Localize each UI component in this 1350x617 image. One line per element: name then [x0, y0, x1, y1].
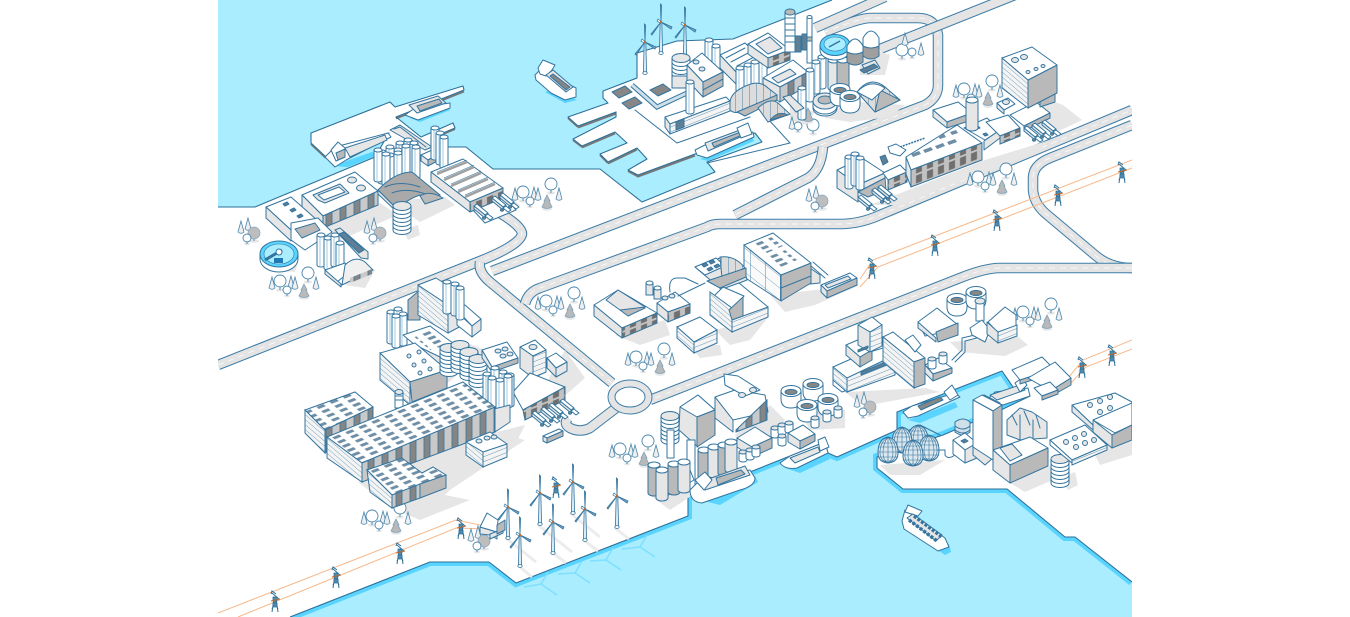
- ribbed dome: [857, 82, 900, 112]
- coal pads: [612, 84, 671, 109]
- top coastline: [218, 0, 832, 207]
- bulk ship at jetty: [325, 133, 391, 167]
- long substation shed: [821, 273, 857, 298]
- south east complex: [833, 286, 1132, 488]
- rounded block: [380, 343, 447, 405]
- right box tower: [715, 374, 768, 432]
- central factory complex: [594, 233, 857, 353]
- low shed: [665, 97, 730, 134]
- land wind turbines: [498, 464, 628, 567]
- tanker at jetty: [405, 96, 450, 122]
- three tall silos: [431, 126, 448, 169]
- stacked column: [970, 298, 990, 342]
- arched hangar: [378, 172, 443, 213]
- road: southern avenue: [650, 268, 1132, 400]
- roof tank block: [482, 342, 518, 372]
- filter unit: [953, 433, 977, 463]
- ribbed hall: [730, 83, 777, 116]
- cans: [739, 421, 793, 462]
- small hangar: [325, 259, 373, 287]
- tanker: [780, 437, 830, 473]
- main factory: [888, 125, 982, 187]
- pier side edges: [311, 92, 695, 176]
- east block with bowl: [918, 286, 986, 342]
- conveyors: [632, 85, 687, 107]
- tree clusters: [238, 33, 1062, 553]
- roundabout: [608, 380, 652, 414]
- egg digesters: [878, 425, 940, 466]
- terraced block: [833, 317, 895, 392]
- tall silos on tower: [443, 280, 464, 320]
- long slab building: [883, 332, 925, 388]
- annex block: [466, 432, 507, 467]
- east box: [788, 425, 815, 449]
- road: west trunk and depot spur: [218, 212, 522, 365]
- rear storage block: [305, 392, 373, 453]
- road: factory access: [566, 405, 620, 430]
- ringed tanks: [440, 340, 487, 388]
- rounded tower block: [744, 233, 828, 301]
- ribbed arch: [758, 101, 790, 122]
- rear box: [933, 97, 978, 131]
- cube building: [457, 305, 481, 337]
- top water body: [218, 0, 832, 207]
- main warehouse: [302, 172, 378, 228]
- striped roof hall: [720, 43, 763, 85]
- top wind turbines: [635, 4, 696, 74]
- road: north trunk: [492, 18, 938, 271]
- rounded office block: [677, 317, 717, 353]
- east roof block: [1072, 393, 1132, 430]
- bay trucks: [532, 399, 579, 427]
- blue clarifier: [820, 34, 850, 60]
- front hall: [367, 458, 446, 508]
- pipe tower: [687, 440, 695, 490]
- pylons: [271, 162, 1127, 612]
- tube: [686, 80, 694, 114]
- curved roof plant: [695, 257, 747, 290]
- plant silos: [736, 56, 767, 100]
- tower: [1002, 47, 1057, 108]
- ringed exhaust tower: [785, 9, 795, 52]
- pipe link: [938, 450, 955, 458]
- capped vessel: [395, 390, 403, 408]
- turbine land shadows: [506, 513, 629, 577]
- striped storage cylinder: [393, 202, 411, 234]
- mid warehouse: [737, 427, 772, 457]
- tall tower: [973, 395, 1002, 465]
- silo bank: [374, 138, 420, 187]
- gray silo row north: [698, 439, 737, 481]
- warehouse with gable: [594, 290, 657, 338]
- bottom water body: [290, 371, 1132, 617]
- stacks: [705, 38, 720, 78]
- power plant complex: [612, 9, 900, 163]
- low blocks east: [1050, 425, 1107, 465]
- gray silo row south: [648, 459, 694, 501]
- pipe bridge: [952, 335, 977, 362]
- plant yard outline: [635, 107, 790, 163]
- loading wing with trucks: [1010, 102, 1061, 142]
- road: central branch: [735, 147, 823, 215]
- pipe run: [670, 278, 705, 296]
- clarifier tank: [260, 241, 298, 272]
- ship in basin: [903, 385, 960, 423]
- moored ship west: [535, 60, 577, 103]
- ribbed ball: [955, 419, 970, 435]
- east tall block: [1093, 403, 1132, 448]
- tall flue: [807, 16, 812, 63]
- road: middle loop: [525, 110, 1132, 304]
- power lines: [218, 160, 1132, 617]
- conveyor pier: [390, 125, 432, 150]
- pier box: [420, 150, 436, 166]
- harbour silo works: [648, 374, 842, 505]
- background: [218, 0, 1132, 617]
- small process units: [860, 60, 880, 74]
- north west complex: [260, 96, 519, 287]
- bowls: [781, 378, 842, 428]
- rear block: [403, 326, 458, 357]
- striped tower: [408, 278, 463, 333]
- small silos and conveyor: [317, 228, 368, 275]
- deep blue coast edge: [290, 371, 1132, 617]
- dock ship: [695, 123, 754, 161]
- coil tower: [661, 412, 679, 458]
- silo group: [483, 366, 514, 412]
- twin silos: [646, 281, 661, 299]
- building shadows: [265, 45, 1132, 520]
- round tanks: [813, 84, 860, 116]
- trio silos: [387, 307, 407, 348]
- small annex box: [547, 353, 567, 377]
- tank box: [997, 98, 1015, 114]
- cubic annex: [520, 340, 546, 378]
- roads: [218, 0, 1132, 430]
- big south west factory: [305, 278, 579, 508]
- small pump house: [657, 292, 690, 322]
- rounded shed: [987, 307, 1017, 343]
- bottom coastline: [290, 371, 1132, 617]
- tray blocks: [1012, 357, 1071, 400]
- west building: [266, 197, 332, 250]
- tank platform: [925, 352, 952, 381]
- dark scrubbers: [795, 34, 807, 52]
- road truck: [543, 429, 563, 443]
- bulk carrier: [690, 466, 758, 505]
- east factory complex: [837, 47, 1061, 211]
- container ship: [902, 505, 951, 555]
- link block: [883, 165, 907, 190]
- turbine substation: [480, 513, 505, 539]
- terrace tower: [710, 283, 768, 332]
- truck depot: [431, 159, 519, 223]
- bag cluster: [1007, 408, 1047, 440]
- service pad: [513, 373, 565, 420]
- turbine hall: [763, 60, 808, 102]
- turbine reflections on water: [524, 535, 655, 595]
- main storage slab: [327, 382, 510, 482]
- process columns: [783, 55, 849, 120]
- generator hall: [748, 33, 790, 68]
- left box tower: [679, 395, 715, 447]
- road: south link to roundabout: [480, 262, 612, 383]
- coil tank: [1051, 454, 1069, 488]
- road: north east branches: [815, 0, 1015, 49]
- wing two: [986, 115, 1020, 144]
- silo building: [837, 152, 897, 211]
- boiler house: [687, 53, 723, 97]
- small ship in inlet: [987, 378, 1030, 405]
- coil tower: [672, 54, 690, 88]
- road: eastern curve: [1033, 125, 1132, 268]
- spherical tanks: [847, 31, 879, 65]
- gray tank box: [993, 437, 1048, 483]
- wing one: [964, 118, 1000, 150]
